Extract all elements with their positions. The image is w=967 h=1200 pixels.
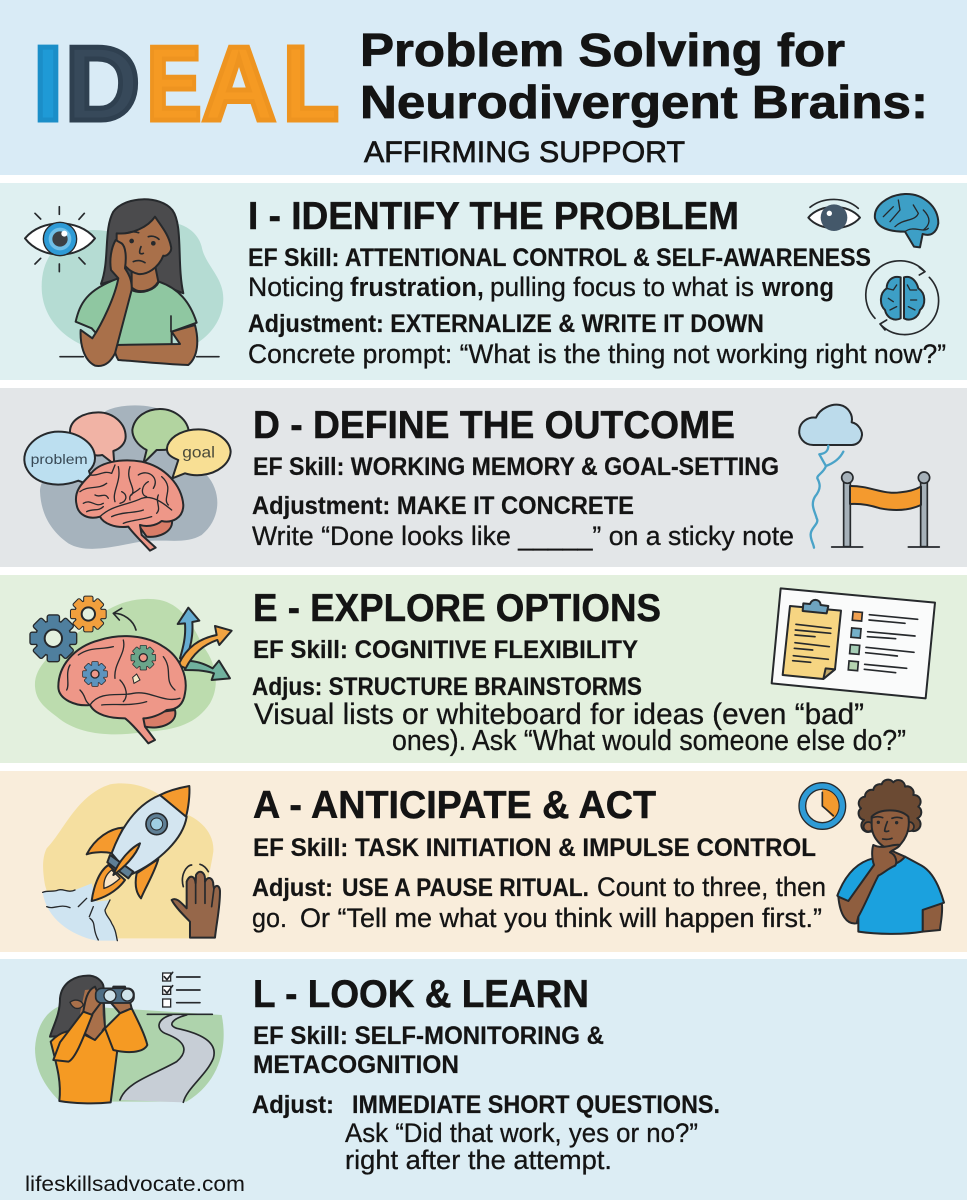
adjustment: Adjustment: MAKE IT CONCRETE bbox=[252, 492, 634, 520]
illustration: brain with speech bubbles: goal bbox=[182, 445, 215, 462]
EF skill: EF Skill: SELF-MONITORING & bbox=[253, 1022, 604, 1050]
description: Noticing bbox=[248, 272, 344, 302]
illustration: rocket and raised hand bbox=[43, 783, 220, 941]
description: go. bbox=[252, 903, 287, 933]
logo: IDEAL: D bbox=[65, 25, 140, 143]
adjustment: IMMEDIATE SHORT QUESTIONS. bbox=[352, 1091, 720, 1119]
EF skill: EF Skill: COGNITIVE FLEXIBILITY bbox=[253, 636, 638, 664]
EF skill: METACOGNITION bbox=[253, 1051, 459, 1079]
description: Visual lists or whiteboard for ideas (even “bad” bbox=[254, 698, 864, 731]
icon: clipboard and checklist card bbox=[772, 588, 935, 698]
description bbox=[345, 1118, 698, 1175]
EF skill: EF Skill: WORKING MEMORY & GOAL-SETTING bbox=[253, 453, 779, 481]
icons: eye, brain, cycling brain bbox=[808, 194, 939, 335]
panel: A - anticipate and act bbox=[0, 771, 967, 952]
logo: IDEAL: I bbox=[33, 25, 63, 143]
logo: IDEAL: A bbox=[202, 25, 276, 143]
logo: IDEAL bbox=[33, 25, 339, 143]
title: Problem Solving for bbox=[360, 24, 845, 76]
illustration: worried person with eye bbox=[25, 199, 223, 366]
description: frustration, bbox=[350, 272, 484, 302]
heading: E - EXPLORE OPTIONS bbox=[253, 587, 661, 630]
adjustment: Adjustment: EXTERNALIZE & WRITE IT DOWN bbox=[248, 310, 764, 338]
illustration: brain with speech bubbles: problem bbox=[31, 451, 88, 467]
description: Write “Done looks like _____” on a sticky note bbox=[252, 521, 794, 551]
description bbox=[248, 272, 834, 302]
title bbox=[360, 24, 928, 128]
prompt: Concrete prompt: “What is the thing not working right now?” bbox=[248, 339, 946, 369]
logo: IDEAL: L bbox=[283, 25, 339, 143]
description: wrong bbox=[761, 272, 834, 302]
panel: I - identify the problem bbox=[0, 183, 967, 380]
illustration: brain with speech bubbles bbox=[24, 405, 231, 551]
title: Neurodivergent Brains: bbox=[360, 76, 928, 128]
footer: website: lifeskillsadvocate.com bbox=[25, 1173, 245, 1196]
adjustment: USE A PAUSE RITUAL. bbox=[342, 874, 589, 902]
description: Or “Tell me what you think will happen first.” bbox=[300, 903, 822, 933]
adjustment: Adjust: bbox=[252, 874, 333, 902]
adjustment: Adjus: STRUCTURE BRAINSTORMS bbox=[252, 673, 642, 701]
illustration: brain with gears and arrows bbox=[31, 597, 232, 743]
heading: D - DEFINE THE OUTCOME bbox=[253, 404, 735, 447]
panel: E - explore options bbox=[0, 575, 967, 763]
subtitle: AFFIRMING SUPPORT bbox=[364, 136, 685, 169]
panel: L - look and learn bbox=[0, 959, 967, 1200]
description: pulling focus to what is bbox=[490, 272, 754, 302]
description: right after the attempt. bbox=[345, 1145, 612, 1175]
description: Ask “Did that work, yes or no?” bbox=[345, 1118, 698, 1148]
description: ones). Ask “What would someone else do?” bbox=[392, 725, 906, 757]
heading: L - LOOK & LEARN bbox=[253, 973, 589, 1016]
adjustment: Adjust: bbox=[252, 1091, 334, 1119]
header panel bbox=[0, 0, 967, 175]
EF skill bbox=[253, 1022, 604, 1079]
EF skill: EF Skill: TASK INITIATION & IMPULSE CONTROL bbox=[253, 834, 816, 862]
logo: IDEAL: E bbox=[146, 25, 202, 143]
EF skill: EF Skill: ATTENTIONAL CONTROL & SELF-AWARENESS bbox=[248, 244, 871, 272]
illustration: clock and thinking person bbox=[799, 780, 944, 934]
icon: cloud, lightning and finish line bbox=[799, 405, 939, 548]
heading: I - IDENTIFY THE PROBLEM bbox=[248, 195, 739, 238]
illustration: person with binoculars, road and checklist bbox=[35, 972, 224, 1103]
adjustment: Count to three, then bbox=[597, 872, 826, 902]
panel: D - define the outcome bbox=[0, 388, 967, 567]
description bbox=[254, 698, 906, 757]
heading: A - ANTICIPATE & ACT bbox=[253, 784, 656, 827]
adjustment bbox=[252, 872, 826, 902]
